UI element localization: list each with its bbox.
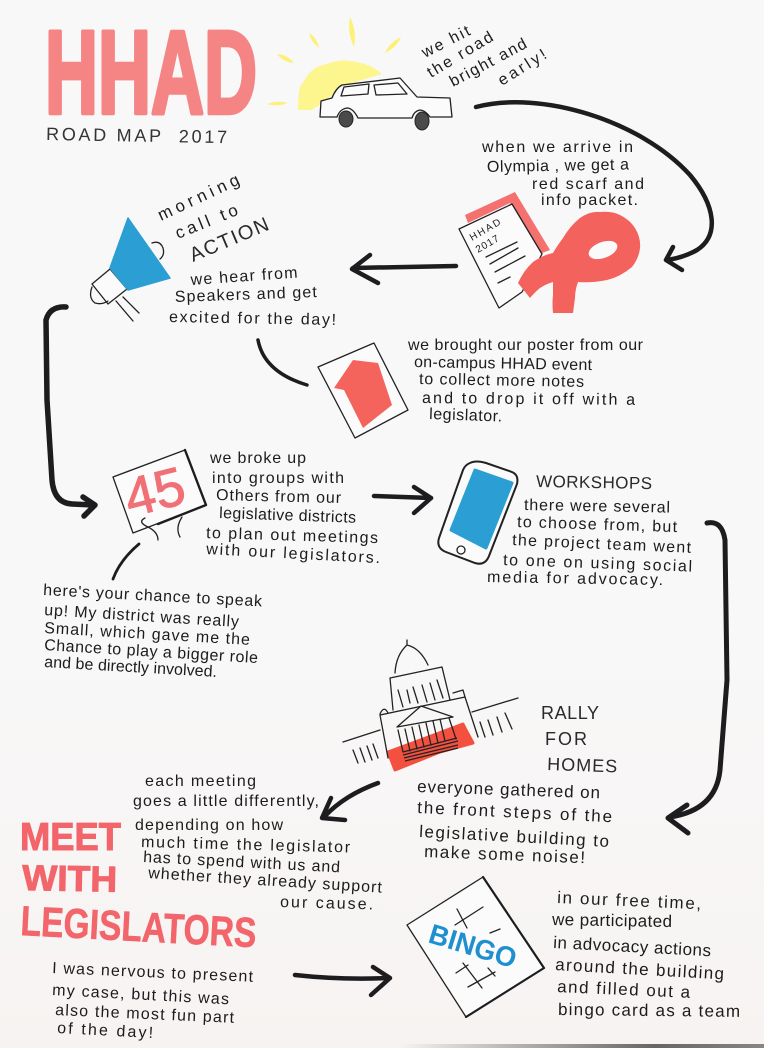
- caption: each meeting: our cause.: [280, 894, 373, 913]
- caption: workshops: WORKSHOPS: [536, 472, 652, 493]
- caption: breakout groups: [205, 450, 380, 567]
- icon: capitol building: [343, 640, 518, 770]
- caption: bingo actions: and filled out a: [557, 977, 691, 1002]
- caption: nervous to present: I was nervous to present: [52, 960, 254, 986]
- caption: morning call to action: Speakers and get: [175, 284, 318, 306]
- caption: rally for homes: FOR: [545, 729, 587, 749]
- caption: breakout groups: we broke up: [209, 450, 306, 467]
- icon: info packet: 2017: [474, 233, 502, 256]
- arrow: groups to workshops: [374, 487, 431, 513]
- caption: nervous to present: my case, but this was: [52, 982, 229, 1008]
- arrow: scarf to megaphone: [352, 255, 456, 283]
- arrow: rally to meetings: [322, 783, 378, 820]
- caption: workshops: to choose from, but: [517, 514, 678, 536]
- caption: each meeting: depending on how: [135, 817, 283, 834]
- caption: each meeting: each meeting: [145, 773, 256, 790]
- caption: poster: legislator.: [429, 406, 502, 426]
- caption: arrive in Olympia: Olympia , we get a: [487, 157, 629, 176]
- caption: bingo actions: bingo card as a team: [558, 1000, 740, 1021]
- caption: rally for homes: HOMES: [547, 754, 618, 776]
- caption: we hit the road: bright and: [447, 36, 530, 91]
- caption: each meeting: goes a little differently,: [133, 793, 319, 810]
- caption: arrive in Olympia: when we arrive in: [481, 139, 633, 156]
- icon: bingo card: BINGO: [425, 918, 520, 974]
- caption: your chance to speak up: [43, 582, 263, 681]
- connector: megaphone to poster: [258, 340, 307, 385]
- caption: nervous to present: also the most fun part: [55, 1002, 235, 1027]
- caption: we hit the road: we hit: [418, 23, 474, 62]
- connector: sign to note: [113, 544, 139, 579]
- icon: info packet: HHAD: [468, 217, 503, 244]
- caption: breakout groups: Others from our: [216, 487, 342, 507]
- caption: arrive in Olympia: info packet.: [541, 192, 638, 209]
- caption: workshops: [487, 472, 692, 589]
- caption: morning call to action: call to: [172, 200, 241, 243]
- arrow: workshops to rally: [668, 523, 727, 833]
- caption: your chance to speak up: up! My district was really: [44, 602, 239, 631]
- caption: bingo actions: [551, 888, 740, 1021]
- caption: poster: [407, 337, 644, 426]
- caption: poster: and to drop it off with a: [422, 390, 635, 409]
- caption: rally for homes: RALLY: [541, 703, 599, 723]
- title: HHAD: [45, 7, 257, 139]
- caption: rally for homes: legislative building to: [419, 822, 610, 851]
- caption: each meeting: has to spend with us and: [143, 849, 340, 876]
- icon: sun: [267, 17, 401, 110]
- caption: rally for homes: the front steps of the: [417, 798, 612, 826]
- caption: poster: we brought our poster from our: [407, 337, 644, 354]
- icon: district 45 sign: [113, 450, 206, 540]
- caption: your chance to speak up: and be directly involved.: [44, 654, 217, 681]
- caption: bingo actions: in advocacy actions: [553, 933, 712, 960]
- icon: car: [320, 78, 452, 130]
- caption: morning call to action: excited for the day!: [169, 309, 336, 329]
- caption: morning call to action: [155, 170, 336, 329]
- icon: house poster: [318, 343, 408, 438]
- caption: poster: on-campus HHAD event: [414, 354, 593, 374]
- caption: workshops: the project team went: [512, 532, 692, 557]
- caption: morning call to action: morning: [155, 170, 242, 225]
- caption: breakout groups: into groups with: [212, 470, 344, 487]
- subtitle: road map 2017: ROAD MAP 2017: [46, 124, 227, 147]
- caption: rally for homes: [417, 703, 618, 867]
- caption: arrive in Olympia: red scarf and: [532, 176, 644, 193]
- caption: we hit the road: early!: [495, 46, 550, 89]
- caption: morning call to action: ACTION: [186, 214, 272, 267]
- caption: each meeting: much time the legislator: [141, 834, 351, 856]
- icon: bingo card: [407, 877, 544, 1017]
- heading: meet with legislators: [20, 816, 258, 956]
- caption: bingo actions: we participated: [551, 910, 672, 931]
- icon: district 45 sign: 45: [118, 456, 191, 529]
- caption: morning call to action: we hear from: [189, 265, 298, 289]
- caption: your chance to speak up: Small, which gave me the: [44, 620, 251, 649]
- caption: breakout groups: to plan out meetings: [206, 525, 378, 547]
- caption: workshops: media for advocacy.: [487, 569, 663, 589]
- caption: poster: to collect more notes: [419, 371, 584, 391]
- icon: red ribbon scarf: [518, 212, 640, 313]
- caption: your chance to speak up: Chance to play a bigger role: [44, 637, 258, 667]
- caption: rally for homes: make some noise!: [424, 842, 585, 867]
- icon: smartphone: [438, 462, 517, 564]
- heading: meet with legislators: WITH: [22, 857, 118, 900]
- caption: each meeting: [133, 773, 383, 913]
- caption: bingo actions: around the building: [555, 955, 725, 983]
- arrow: car to scarf: [476, 102, 712, 270]
- caption: breakout groups: legislative districts: [219, 505, 356, 527]
- caption: your chance to speak up: here's your chance to speak: [43, 582, 263, 611]
- caption: rally for homes: everyone gathered on: [417, 777, 600, 802]
- icon: megaphone: [91, 218, 170, 321]
- caption: workshops: to one on using social: [503, 552, 692, 576]
- caption: each meeting: whether they already support: [147, 865, 383, 897]
- icon: info packet: [459, 192, 550, 308]
- arrow: meetings to bingo: [295, 967, 390, 995]
- caption: arrive in Olympia: [481, 139, 644, 209]
- caption: we hit the road: [418, 23, 550, 91]
- arrow: megaphone to district sign: [46, 307, 95, 516]
- caption: nervous to present: [52, 960, 254, 1042]
- heading: meet with legislators: MEET: [20, 816, 121, 859]
- heading: meet with legislators: LEGISLATORS: [20, 897, 258, 956]
- caption: bingo actions: in our free time,: [557, 888, 702, 913]
- caption: workshops: there were several: [524, 497, 670, 517]
- caption: breakout groups: with our legislators.: [205, 541, 380, 567]
- caption: nervous to present: of the day!: [57, 1020, 154, 1042]
- caption: we hit the road: the road: [424, 29, 496, 81]
